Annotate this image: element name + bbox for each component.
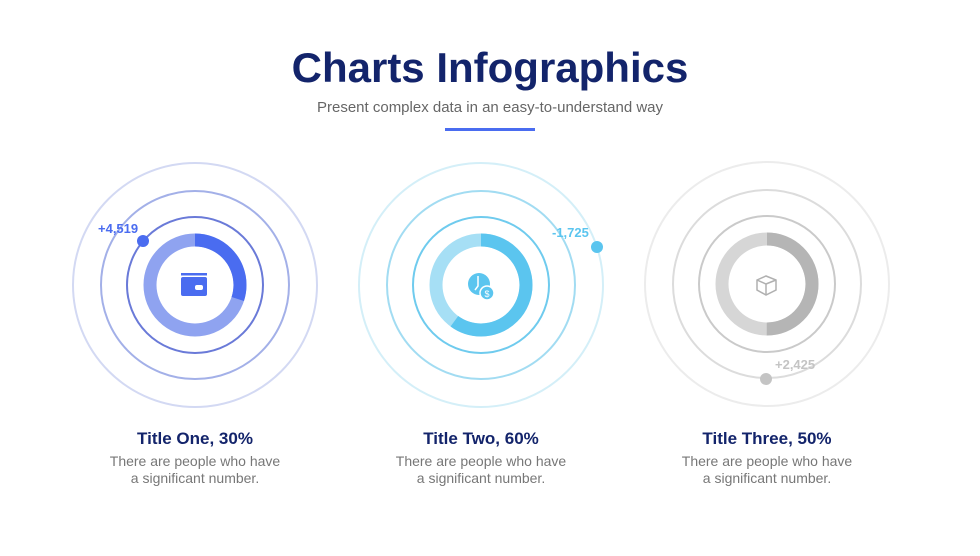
panel: chart one [73, 163, 317, 407]
text block: title two [396, 429, 566, 486]
title underline [445, 128, 535, 131]
icon: credit card [181, 273, 207, 296]
subtitle: Present complex data in an easy-to-understand way [317, 99, 664, 116]
text block: title three [682, 429, 852, 486]
value marker: -1,725 [552, 225, 589, 240]
text block: title two: a significant number. [417, 470, 545, 486]
donut: 50% [722, 239, 812, 329]
icon: money [468, 273, 494, 300]
panel: chart three [645, 162, 889, 406]
panel: chart two [359, 163, 603, 407]
donut: 60% [436, 240, 526, 330]
value marker: +4,519 [98, 221, 138, 236]
value marker [98, 221, 149, 247]
text block: title one: Title One, 30% [137, 429, 253, 448]
text block: title one: a significant number. [131, 470, 259, 486]
text block: title one [110, 429, 280, 486]
text block: title three: Title Three, 50% [702, 429, 832, 448]
title: Charts Infographics [292, 44, 688, 91]
value marker: +2,425 [775, 357, 815, 372]
icon: money: $ [484, 289, 490, 299]
text block: title two: Title Two, 60% [423, 429, 539, 448]
donut: 30% [150, 240, 240, 330]
value marker [552, 225, 603, 253]
text block: title three: a significant number. [703, 470, 831, 486]
text block: title three: There are people who have [682, 453, 852, 469]
value marker [760, 357, 815, 385]
text block: title one: There are people who have [110, 453, 280, 469]
text block: title two: There are people who have [396, 453, 566, 469]
icon: box [757, 276, 776, 295]
